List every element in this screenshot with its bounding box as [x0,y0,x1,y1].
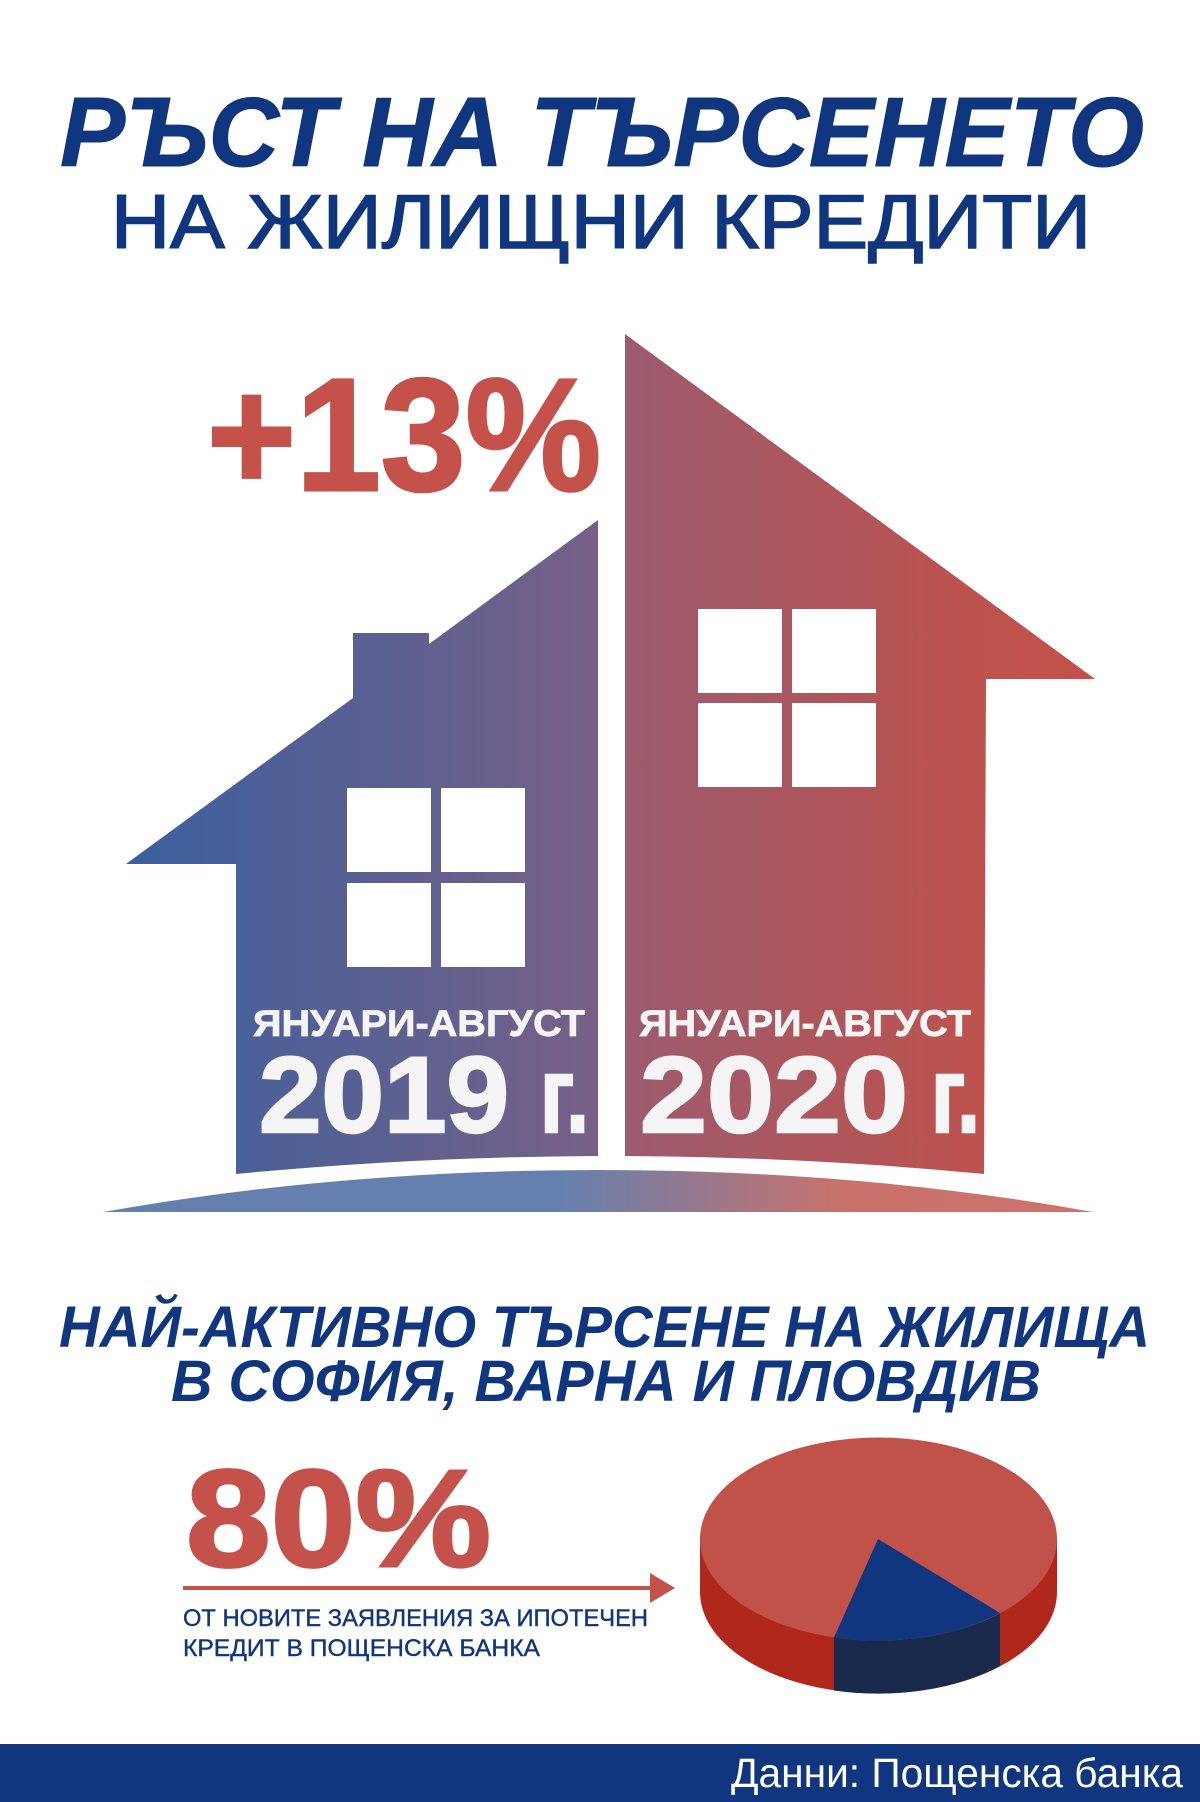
statistic 80%: 80% [186,1442,491,1596]
footer band: Данни: Пощенска банка [731,1750,1183,1796]
house 2020 [625,334,1095,1174]
house 2020: ЯНУАРИ-АВГУСТ [639,1003,971,1044]
section heading: НАЙ-АКТИВНО ТЪРСЕНЕ НА ЖИЛИЩА [59,1294,1150,1360]
section heading: В СОФИЯ, ВАРНА И ПЛОВДИВ [171,1349,1041,1414]
arrow [183,1573,675,1603]
3D pie chart [700,1438,1057,1694]
statistic description: ОТ НОВИТЕ ЗАЯВЛЕНИЯ ЗА ИПОТЕЧЕН [183,1605,648,1632]
title: НА ЖИЛИЩНИ КРЕДИТИ [111,180,1091,265]
house 2019: г. [540,1034,589,1155]
house 2020: 2020 [640,1034,908,1155]
statistic description [183,1605,648,1662]
title [60,77,1144,265]
growth figure +13%: +13% [207,345,601,524]
section heading [59,1294,1150,1414]
house 2019: 2019 [259,1034,509,1155]
footer band [0,1744,1200,1802]
house 2019: ЯНУАРИ-АВГУСТ [253,1003,585,1044]
title: РЪСТ НА ТЪРСЕНЕТО [60,77,1144,187]
house 2020: г. [931,1034,980,1155]
ground arc [103,1170,1093,1212]
statistic description: КРЕДИТ В ПОЩЕНСКА БАНКА [183,1635,540,1662]
house 2019 [126,520,598,1174]
